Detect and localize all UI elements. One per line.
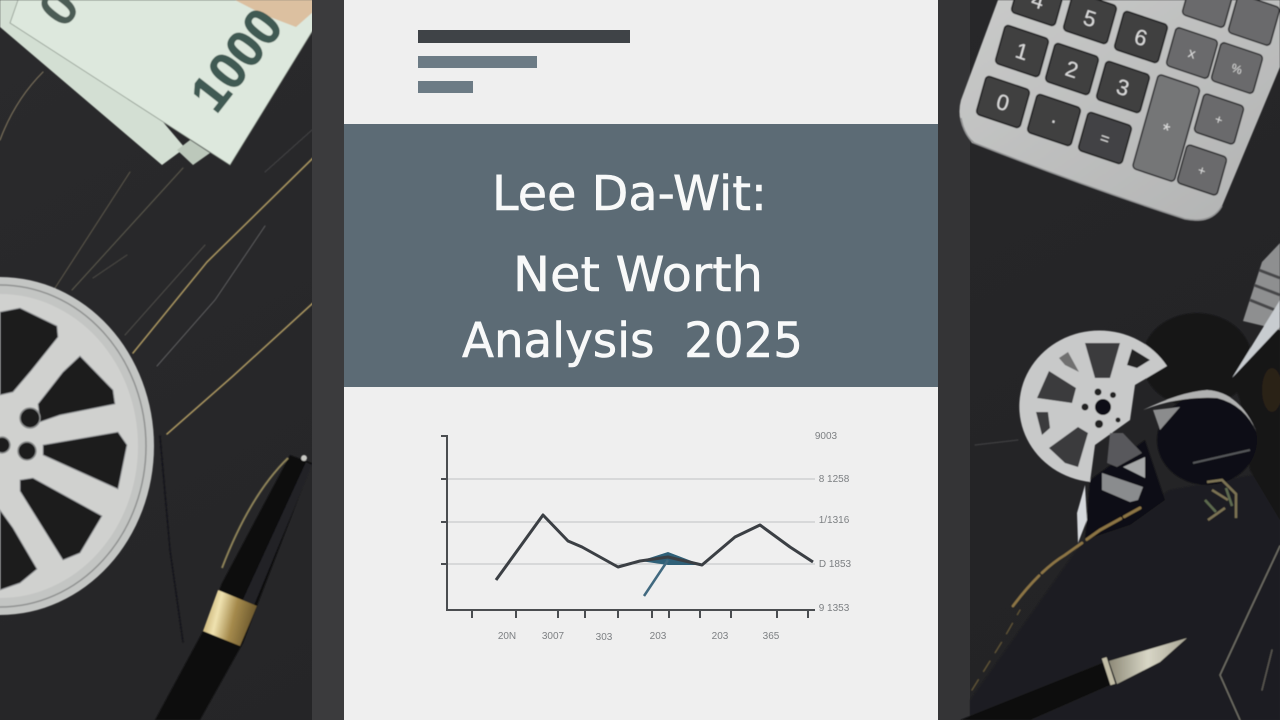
y axis labels: 9 1353	[819, 603, 850, 614]
x axis labels: 303	[596, 632, 613, 643]
film reel large	[0, 277, 154, 615]
calculator keys: 3	[1114, 74, 1132, 101]
x axis labels: 3007	[542, 631, 565, 642]
calculator keys: 5	[1081, 5, 1099, 32]
placeholder header bars	[418, 30, 630, 93]
calculator keys: .	[1049, 103, 1061, 129]
report page	[344, 0, 938, 720]
black blob behind reel	[1085, 313, 1280, 540]
data line	[496, 515, 813, 580]
black pen with gold band	[155, 455, 312, 720]
x axis labels: 203	[712, 631, 729, 642]
calculator keys: %	[1230, 61, 1244, 77]
calculator keys: 1	[1013, 38, 1031, 65]
page sheet	[344, 0, 938, 720]
chart axes and ticks	[441, 436, 815, 618]
calculator keys: 2	[1063, 56, 1081, 83]
x axis labels: 365	[763, 631, 780, 642]
gold marble veins	[972, 440, 1280, 720]
title line 3: Analysis 2025	[462, 313, 803, 369]
x axis labels	[498, 631, 780, 643]
calculator keys: 0	[994, 89, 1012, 116]
calculator	[959, 0, 1280, 221]
right desk objects	[959, 0, 1280, 720]
marble veins	[0, 72, 313, 642]
small broken film reel	[1019, 331, 1167, 482]
gold fleck patch	[1205, 480, 1236, 520]
title line 1: Lee Da-Wit:	[492, 166, 767, 222]
banknotes	[0, 0, 313, 165]
darker lower marble	[970, 470, 1280, 720]
clipboard frame right	[938, 0, 970, 720]
fountain pen	[960, 638, 1187, 720]
title line 2: Net Worth	[513, 247, 763, 303]
calculator keys: +	[1213, 111, 1224, 128]
calculator keys: *	[1159, 119, 1172, 143]
chart gridlines	[447, 479, 815, 564]
y axis labels: 8 1258	[819, 474, 850, 485]
calculator keys: x	[1187, 44, 1197, 62]
calculator keys: =	[1098, 130, 1111, 149]
calculator keys	[976, 0, 1280, 196]
calculator keys: +	[1196, 162, 1207, 179]
line chart	[441, 431, 852, 643]
teal highlight	[640, 552, 702, 596]
shattered shards	[1077, 407, 1180, 543]
y axis labels	[815, 431, 852, 614]
clipboard frame left	[312, 0, 344, 720]
calculator keys: 6	[1132, 24, 1150, 51]
y axis labels: 1/1316	[819, 515, 850, 526]
y axis labels: D 1853	[819, 559, 852, 570]
second reel and blade at edge	[1232, 243, 1280, 378]
title band	[344, 124, 938, 387]
x axis labels: 203	[650, 631, 667, 642]
x axis labels: 20N	[498, 631, 516, 642]
y axis labels: 9003	[815, 431, 838, 442]
left desk objects	[0, 0, 313, 720]
curled film strip	[1143, 390, 1257, 463]
